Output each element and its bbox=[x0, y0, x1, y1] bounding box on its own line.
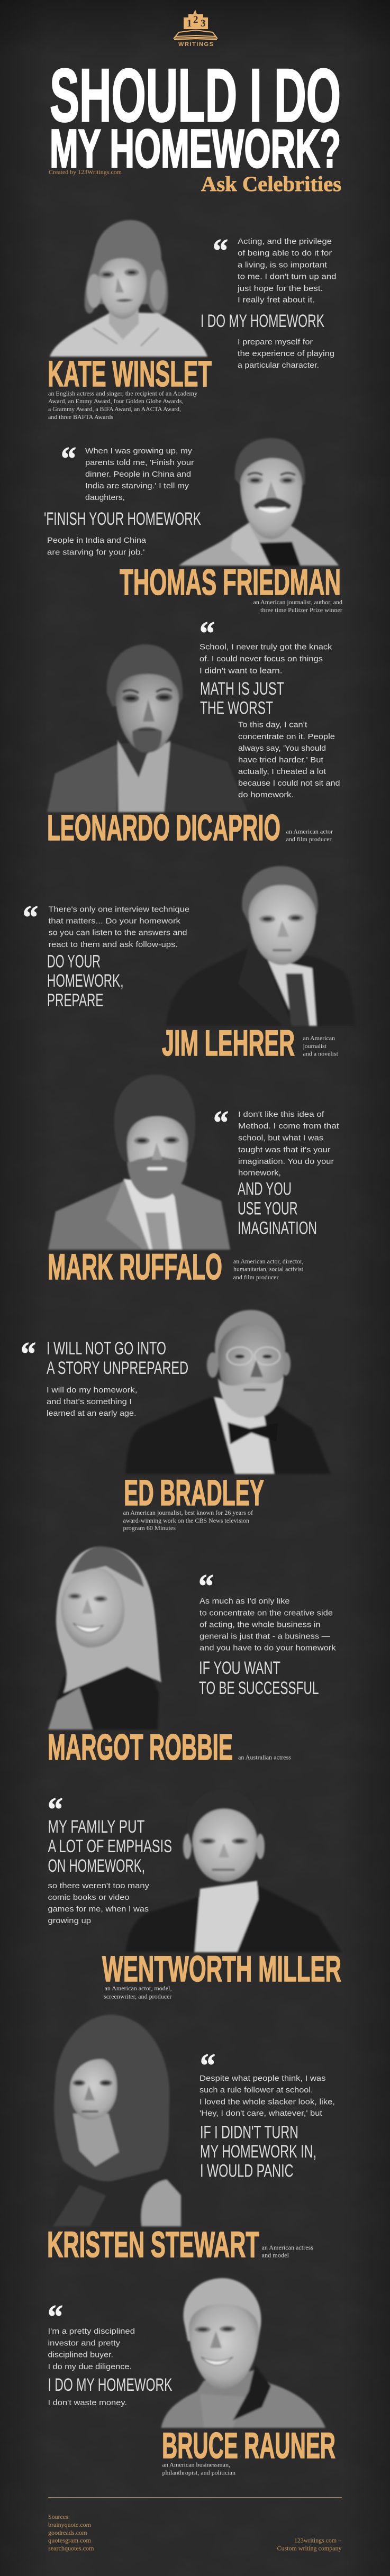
quote text: and you have to do your homework bbox=[199, 1643, 336, 1653]
logo: 123 Writings: 2 bbox=[193, 14, 198, 25]
quote text: As much as I'd only like bbox=[199, 1597, 290, 1606]
quote text: that matters... Do your homework bbox=[49, 916, 181, 926]
quote heading: 'FINISH YOUR HOMEWORK bbox=[44, 509, 201, 529]
logo: 123 Writings bbox=[174, 10, 217, 48]
quote text: dinner. People in China and bbox=[85, 470, 191, 479]
quote text: I will do my homework, bbox=[47, 1386, 138, 1395]
quote text: so you can listen to the answers and bbox=[49, 928, 187, 937]
quote heading: IF I DIDN'T TURN bbox=[200, 2123, 298, 2143]
sources: Sources: bbox=[48, 2513, 70, 2520]
quote text continued: because I could not sit and bbox=[238, 779, 340, 788]
quote mark: “ bbox=[199, 614, 215, 652]
quote heading: IF YOU WANT bbox=[199, 1658, 280, 1678]
quote text: of. I could never focus on things bbox=[199, 654, 323, 663]
quote text: There's only one interview technique bbox=[49, 905, 189, 914]
quote heading bbox=[238, 1179, 317, 1238]
bio: and film producer bbox=[286, 836, 332, 843]
quote text continued: I prepare myself for bbox=[238, 338, 313, 347]
sources: goodreads.com bbox=[48, 2529, 87, 2536]
quote text: learned at an early age. bbox=[47, 1409, 137, 1418]
quote text: India are starving.' I tell my bbox=[85, 481, 189, 490]
bio: award-winning work on the CBS News television bbox=[123, 1518, 249, 1524]
bio: an American journalist, best known for 26 years of bbox=[123, 1510, 253, 1516]
company credit bbox=[277, 2536, 342, 2552]
name: ED BRADLEY bbox=[124, 1472, 264, 1513]
sources: quotesgram.com bbox=[48, 2536, 92, 2544]
bio bbox=[286, 829, 333, 843]
quote text bbox=[238, 1110, 339, 1178]
name: KATE WINSLET bbox=[48, 353, 212, 394]
quote text continued: actually, I cheated a lot bbox=[238, 767, 326, 776]
quote text bbox=[199, 642, 332, 675]
quote text bbox=[199, 1597, 336, 1653]
bio: and a novelist bbox=[303, 1051, 339, 1057]
bio: an American actor, model, bbox=[105, 1986, 172, 1992]
bio: a Grammy Award, a BIFA Award, an AACTA Award, bbox=[48, 406, 181, 413]
panel: Kristen Stewart bbox=[47, 2015, 335, 2265]
quote heading bbox=[200, 2123, 316, 2181]
bio: an American actor, director, bbox=[233, 1259, 304, 1265]
bio: journalist bbox=[302, 1043, 327, 1050]
portrait: Bruce Rauner bbox=[161, 2278, 325, 2428]
quote text continued: do homework. bbox=[238, 790, 294, 799]
quote heading: I DO MY HOMEWORK bbox=[48, 2375, 173, 2395]
quote text: and that's something I bbox=[47, 1397, 132, 1406]
quote heading bbox=[48, 1817, 172, 1876]
quote text: parents told me, 'Finish your bbox=[85, 458, 194, 467]
name: KRISTEN STEWART bbox=[47, 2224, 259, 2265]
logo: 123 Writings: WRITINGS bbox=[178, 41, 213, 48]
quote text continued: concentrate on it. People bbox=[238, 732, 335, 741]
quote mark: “ bbox=[21, 1335, 36, 1372]
quote text: taught was that it's your bbox=[238, 1145, 330, 1154]
quote heading: IMAGINATION bbox=[238, 1218, 317, 1238]
quote heading: DO YOUR bbox=[47, 951, 101, 971]
bio: three time Pulitzer Prize winner bbox=[260, 607, 342, 614]
quote text: homework, bbox=[238, 1168, 281, 1178]
bio: and three BAFTA Awards bbox=[48, 414, 114, 421]
quote heading: HOMEWORK, bbox=[47, 971, 124, 991]
quote text continued: are starving for your job.' bbox=[47, 548, 145, 557]
quote text bbox=[85, 447, 194, 502]
quote text: general is just that - a business — bbox=[199, 1632, 330, 1641]
bio bbox=[261, 2245, 314, 2259]
portrait: Mark Ruffalo bbox=[48, 1075, 230, 1250]
quote heading: PREPARE bbox=[47, 990, 104, 1011]
quote heading: I DO MY HOMEWORK bbox=[201, 311, 324, 331]
panel: Margot Robbie bbox=[48, 1546, 336, 1768]
quote text: School, I never truly got the knack bbox=[199, 642, 332, 652]
quote heading bbox=[47, 951, 124, 1011]
quote text: just hope for the best. bbox=[237, 284, 323, 293]
quote text: I'm a pretty disciplined bbox=[48, 2327, 135, 2336]
portrait: Thomas Friedman bbox=[179, 438, 339, 566]
panel: Bruce Rauner bbox=[48, 2278, 335, 2476]
quote text: to concentrate on the creative side bbox=[199, 1608, 333, 1618]
portrait: Kate Winslet bbox=[50, 220, 207, 357]
logo: 123 Writings: 3 bbox=[201, 18, 205, 29]
quote mark: “ bbox=[48, 1790, 63, 1828]
name: MARGOT ROBBIE bbox=[48, 1727, 233, 1768]
bio: and film producer bbox=[233, 1275, 279, 1281]
quote text bbox=[48, 2327, 135, 2371]
quote mark: “ bbox=[61, 440, 76, 477]
quote heading bbox=[200, 679, 284, 718]
quote text: I loved the whole slacker look, like, bbox=[199, 2097, 335, 2107]
title bbox=[50, 53, 341, 179]
quote text bbox=[199, 2074, 335, 2118]
quote text continued: To this day, I can't bbox=[238, 721, 307, 729]
quote text continued bbox=[47, 536, 147, 557]
quote mark: “ bbox=[200, 2046, 215, 2084]
quote text continued: People in India and China bbox=[47, 536, 147, 545]
quote text continued: the experience of playing bbox=[238, 349, 334, 358]
quote text: disciplined buyer. bbox=[48, 2350, 113, 2360]
bio: Award, an Emmy Award, four Golden Globe Awards, bbox=[48, 398, 184, 405]
quote text: games for me, when I was bbox=[48, 1905, 149, 1914]
quote heading: MATH IS JUST bbox=[200, 679, 284, 699]
bio bbox=[123, 1510, 253, 1532]
sources: brainyquote.com bbox=[48, 2521, 92, 2528]
quote text bbox=[47, 1386, 138, 1418]
panel: Kate Winslet bbox=[48, 220, 337, 421]
portrait: Wentworth Miller bbox=[125, 1790, 342, 1952]
panel: Leonardo DiCaprio bbox=[47, 614, 340, 848]
quote text: I do my due diligence. bbox=[48, 2362, 132, 2371]
quote heading: ON HOMEWORK, bbox=[48, 1856, 145, 1876]
bio: philanthropist, and politician bbox=[162, 2470, 235, 2476]
bio bbox=[48, 390, 197, 421]
quote text: Method. I come from that bbox=[238, 1122, 339, 1131]
quote heading: I WOULD PANIC bbox=[200, 2161, 293, 2181]
quote mark: “ bbox=[213, 1104, 229, 1141]
portrait: Jim Lehrer bbox=[166, 866, 355, 1026]
quote text bbox=[49, 905, 189, 949]
sources: searchquotes.com bbox=[48, 2545, 94, 2552]
quote text: school, but what I was bbox=[238, 1133, 323, 1143]
portrait: Leonardo DiCaprio bbox=[47, 644, 248, 812]
quote text: such a rule follower at school. bbox=[199, 2086, 313, 2095]
bio: program 60 Minutes bbox=[123, 1525, 176, 1532]
panel: Thomas Friedman bbox=[44, 438, 342, 614]
bio: an American businessman, bbox=[162, 2462, 230, 2469]
quote heading bbox=[199, 1658, 319, 1698]
quote heading: TO BE SUCCESSFUL bbox=[199, 1678, 319, 1698]
portrait: Kristen Stewart bbox=[49, 2015, 181, 2226]
bio: an American actor bbox=[286, 829, 333, 835]
bio: an English actress and singer, the recipient of an Academy bbox=[48, 390, 197, 397]
quote text: When I was growing up, my bbox=[85, 447, 193, 456]
sources bbox=[48, 2513, 94, 2552]
quote text continued: have tried harder.' But bbox=[238, 755, 324, 764]
quote text: Acting, and the privilege bbox=[238, 237, 332, 246]
quote text: I really fret about it. bbox=[238, 295, 315, 305]
quote text bbox=[237, 237, 337, 305]
quote text: daughters, bbox=[85, 493, 125, 502]
company credit: Custom writing company bbox=[277, 2545, 342, 2552]
quote text bbox=[48, 1881, 150, 1925]
name: JIM LEHRER bbox=[162, 1023, 295, 1063]
logo: 123 Writings: 1 bbox=[187, 18, 192, 29]
quote text: I don't like this idea of bbox=[238, 1110, 324, 1119]
quote heading bbox=[47, 1339, 188, 1378]
quote heading: AND YOU bbox=[238, 1179, 292, 1199]
quote text: a living, is so important bbox=[238, 260, 328, 270]
quote text: investor and pretty bbox=[48, 2338, 121, 2348]
quote text continued bbox=[238, 338, 334, 370]
quote text: of acting, the whole business in bbox=[199, 1620, 321, 1630]
credit line: Created by 123Writings.com bbox=[49, 168, 122, 176]
bio bbox=[302, 1035, 339, 1057]
bio: and model bbox=[261, 2253, 289, 2259]
quote heading: USE YOUR bbox=[238, 1199, 297, 1219]
bio: an American bbox=[303, 1035, 335, 1042]
quote mark: “ bbox=[213, 232, 228, 269]
quote text: 'Hey, I don't care, whatever,' but bbox=[199, 2109, 323, 2118]
quote text: react to them and ask follow-ups. bbox=[49, 940, 178, 949]
quote heading: A STORY UNPREPARED bbox=[47, 1358, 188, 1378]
bio: an Australian actress bbox=[238, 1754, 292, 1761]
quote heading: MY HOMEWORK IN, bbox=[200, 2142, 316, 2162]
subtitle: Ask Celebrities bbox=[201, 172, 341, 196]
quote heading: THE WORST bbox=[200, 698, 273, 718]
quote mark: “ bbox=[198, 1567, 214, 1605]
quote text: of being able to do it for bbox=[238, 249, 332, 258]
quote text: growing up bbox=[48, 1916, 91, 1925]
quote text continued: always say, 'You should bbox=[238, 744, 326, 753]
bio: an American journalist, author, and bbox=[253, 599, 342, 606]
quote text continued bbox=[238, 721, 340, 799]
portrait: Ed Bradley bbox=[125, 1310, 331, 1474]
quote mark: “ bbox=[48, 2298, 63, 2335]
bio bbox=[253, 599, 342, 614]
quote text: to me. I don't turn up and bbox=[238, 272, 337, 281]
quote heading: I WILL NOT GO INTO bbox=[47, 1339, 166, 1359]
quote text: imagination. You do your bbox=[238, 1157, 334, 1166]
quote text: Despite what people think, I was bbox=[199, 2074, 326, 2083]
name: MARK RUFFALO bbox=[48, 1246, 222, 1287]
portrait: Margot Robbie bbox=[48, 1546, 161, 1730]
bio bbox=[162, 2462, 235, 2476]
quote text: so there weren't too many bbox=[48, 1881, 150, 1890]
panel: Ed Bradley bbox=[21, 1310, 331, 1532]
bio: humanitarian, social activist bbox=[233, 1267, 304, 1273]
quote heading: A LOT OF EMPHASIS bbox=[48, 1836, 172, 1856]
quote heading: MY FAMILY PUT bbox=[48, 1817, 145, 1837]
quote text continued: I don't waste money. bbox=[48, 2398, 127, 2407]
quote text: I didn't want to learn. bbox=[199, 667, 283, 675]
bio: an American actress bbox=[261, 2245, 314, 2251]
panel: Jim Lehrer bbox=[23, 866, 355, 1063]
bio bbox=[233, 1259, 304, 1281]
panel: Mark Ruffalo bbox=[48, 1075, 339, 1287]
quote text continued: a particular character. bbox=[238, 361, 319, 370]
bio bbox=[104, 1986, 172, 2000]
quote mark: “ bbox=[23, 898, 38, 936]
company credit: 123writings.com – bbox=[294, 2536, 342, 2544]
quote text: comic books or video bbox=[48, 1893, 129, 1902]
bio: screenwriter, and producer bbox=[104, 1994, 172, 2000]
panel: Wentworth Miller bbox=[48, 1790, 342, 2000]
